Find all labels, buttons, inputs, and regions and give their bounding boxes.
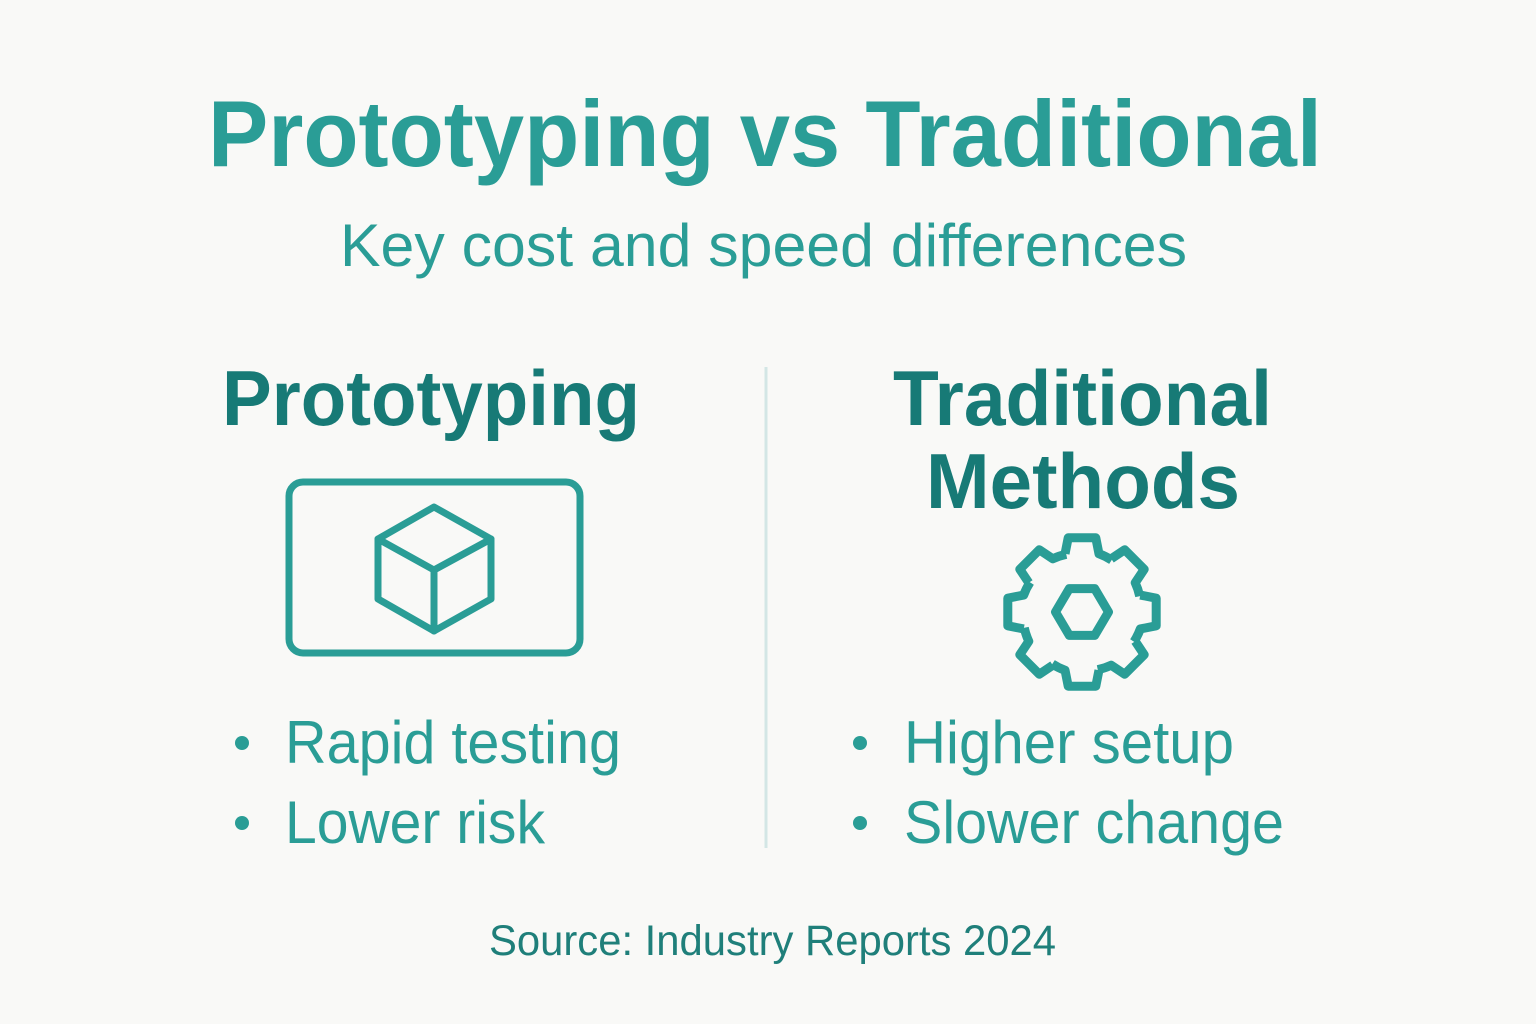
title: Prototyping vs Traditional xyxy=(208,81,1322,186)
icon: cube in frame xyxy=(289,482,580,653)
heading: traditional methods: Methods xyxy=(926,437,1240,525)
bullet list: traditional xyxy=(853,709,1284,856)
bullet list: prototyping xyxy=(235,709,621,856)
panel: traditional xyxy=(853,354,1284,856)
bullet list: traditional: Slower change xyxy=(904,789,1284,856)
heading: traditional methods: Traditional xyxy=(893,354,1272,442)
subtitle: Key cost and speed differences xyxy=(340,212,1187,279)
panel: prototyping xyxy=(222,354,640,856)
heading: traditional methods xyxy=(893,354,1272,525)
source note: Source: Industry Reports 2024 xyxy=(489,917,1056,965)
icon: gear xyxy=(1008,538,1156,686)
bullet list: traditional: Higher setup xyxy=(904,709,1234,776)
heading: prototyping: Prototyping xyxy=(222,354,640,442)
bullet list: prototyping: Rapid testing xyxy=(285,709,621,776)
bullet list: prototyping: Lower risk xyxy=(285,789,546,856)
divider xyxy=(764,367,768,848)
